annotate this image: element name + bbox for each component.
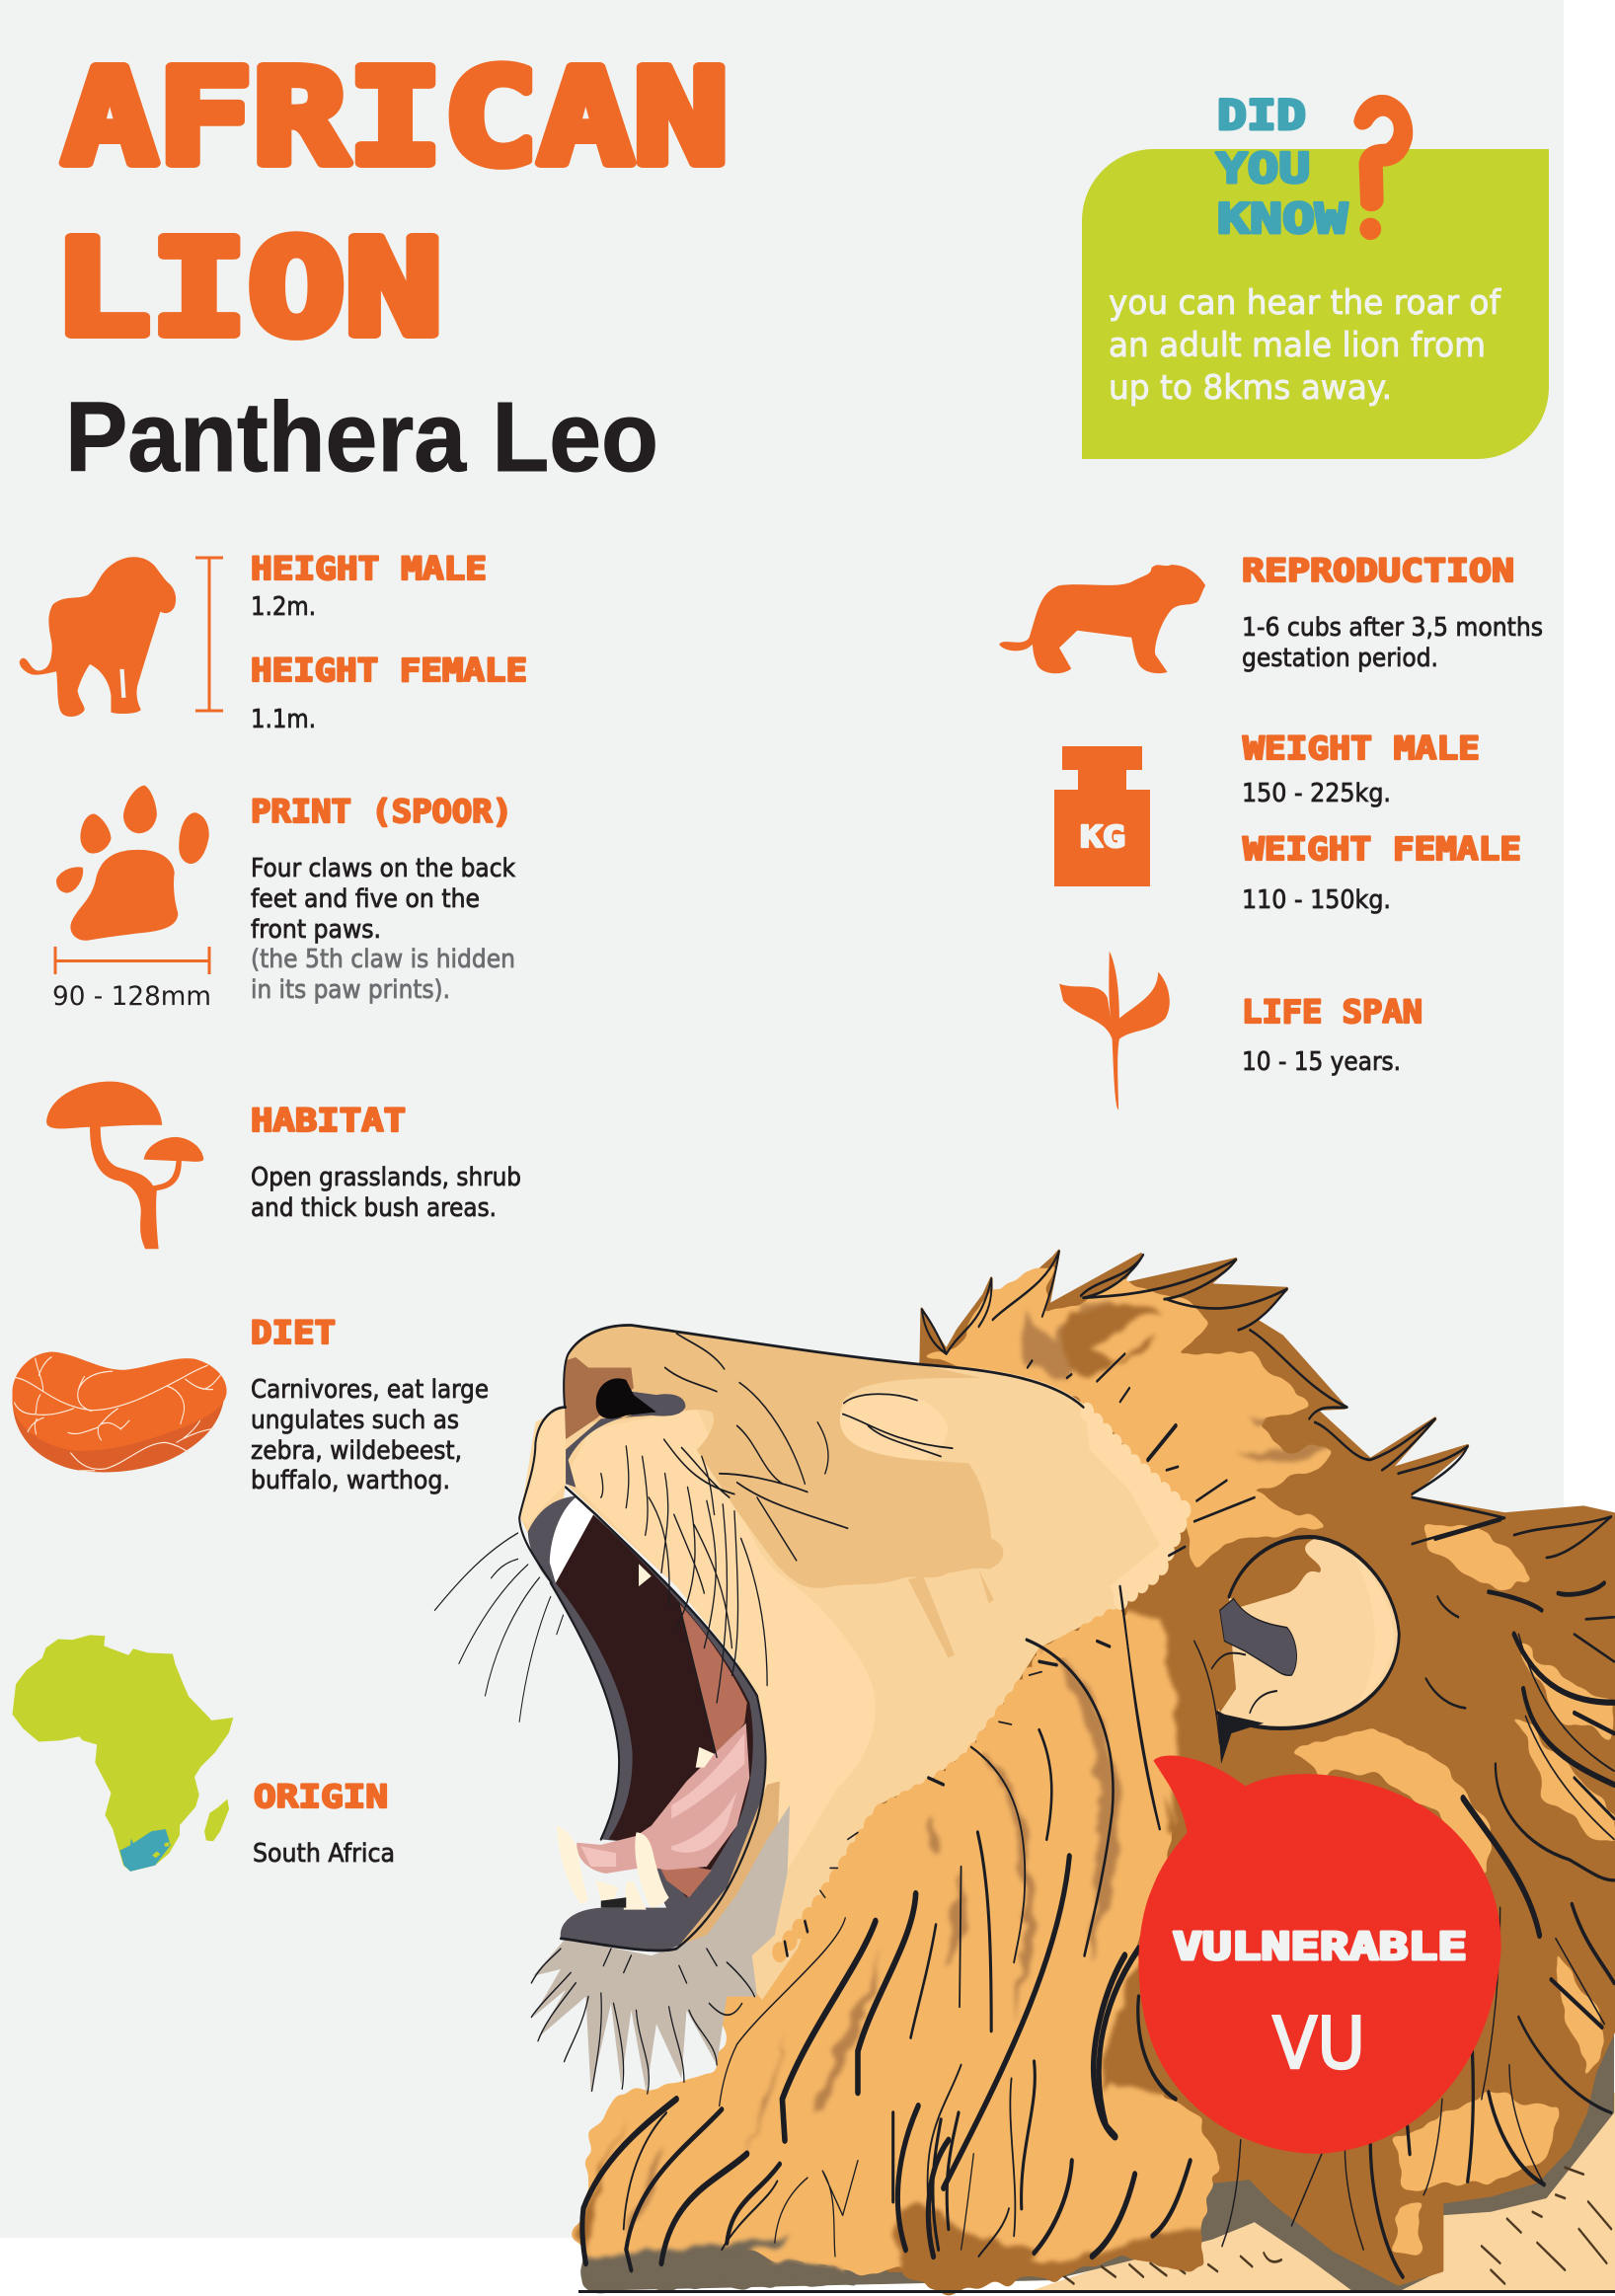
origin text: ORIGIN: [254, 1778, 388, 1815]
mane back: [842, 1252, 1614, 2284]
subtitle: Panthera Leo: Panthera Leo: [65, 382, 658, 493]
print text: [251, 793, 515, 1005]
origin text: [253, 1778, 395, 1869]
callout: did you know: [1082, 91, 1549, 459]
lion ear: [1212, 1537, 1399, 1764]
print text: Four claws on the back: [251, 854, 515, 883]
icon: question mark: [1353, 95, 1413, 240]
callout text: up to 8kms away.: [1109, 368, 1392, 408]
illustration: roaring lion: [434, 1252, 1615, 2293]
height text: 1.2m.: [251, 592, 316, 622]
icon: meat: [12, 1352, 227, 1472]
habitat text: and thick bush areas.: [251, 1193, 497, 1223]
weight text: [1242, 729, 1521, 915]
habitat text: HABITAT: [251, 1102, 406, 1139]
height text: 1.1m.: [251, 705, 316, 734]
print text: (the 5th claw is hidden: [251, 945, 515, 974]
diet text: buffalo, warthog.: [251, 1466, 450, 1495]
reproduction text: 1-6 cubs after 3,5 months: [1242, 613, 1543, 643]
habitat text: Open grasslands, shrub: [251, 1163, 521, 1192]
whiskers: [434, 1533, 564, 1722]
weight text: WEIGHT FEMALE: [1243, 830, 1521, 868]
icon: lion cub: [999, 565, 1205, 673]
life span text: [1242, 993, 1423, 1077]
icon: paw print: [56, 786, 209, 941]
scalloped fur edge around the face: [780, 1615, 1117, 1952]
badge code: VU: [1272, 2002, 1365, 2085]
reproduction text: REPRODUCTION: [1242, 552, 1514, 589]
height text: HEIGHT MALE: [251, 550, 487, 587]
print text: front paws.: [251, 915, 381, 945]
title: African Lion: LION: [53, 213, 442, 365]
callout text: an adult male lion from: [1109, 326, 1486, 365]
face: [520, 1325, 1186, 2094]
icon: weight: KG: [1080, 820, 1125, 855]
title: African Lion: AFRICAN: [62, 42, 729, 194]
diet text: ungulates such as: [251, 1406, 459, 1435]
diet text: Carnivores, eat large: [251, 1375, 489, 1405]
icon: lion silhouette: [20, 557, 176, 717]
height text: HEIGHT FEMALE: [251, 651, 527, 689]
weight text: 150 - 225kg.: [1242, 779, 1391, 808]
mane light fur patches: [578, 1265, 1614, 2290]
diet text: zebra, wildebeest,: [251, 1436, 462, 1466]
icon: sprout: [1059, 952, 1170, 1110]
print size measure: 90 - 128mm: [52, 981, 211, 1012]
origin text: South Africa: [253, 1839, 395, 1869]
speech bubble: [1138, 1755, 1501, 2154]
mane strokes left: [582, 1586, 1191, 2270]
callout heading: [1216, 91, 1348, 243]
title: African Lion: [53, 42, 729, 365]
weight text: WEIGHT MALE: [1243, 729, 1480, 767]
weight text: 110 - 150kg.: [1242, 885, 1391, 915]
callout text: you can hear the roar of: [1109, 283, 1501, 323]
diet text: [251, 1314, 489, 1495]
height bracket: [195, 558, 223, 711]
ground and shadow: [592, 2030, 1615, 2292]
print text: feet and five on the: [251, 884, 480, 914]
life span text: 10 - 15 years.: [1242, 1047, 1401, 1077]
mane strokes right: [922, 1252, 1614, 2277]
grey chin beard: [531, 1781, 790, 2094]
callout heading: YOU: [1216, 144, 1310, 192]
badge: vulnerable status: [1138, 1755, 1501, 2154]
icon: map of Africa: [12, 1635, 233, 1872]
ground line: [578, 2290, 1615, 2293]
icon: weight: [1054, 746, 1150, 886]
callout text: [1109, 283, 1501, 408]
icon: acacia tree: [46, 1082, 203, 1249]
callout panel: [1082, 149, 1549, 459]
open mouth: [528, 1496, 766, 1951]
nose: [565, 1357, 685, 1488]
life span text: LIFE SPAN: [1242, 993, 1423, 1031]
callout heading: DID: [1217, 91, 1306, 139]
print text: in its paw prints).: [251, 975, 450, 1005]
height text: [251, 550, 527, 734]
diet text: DIET: [251, 1314, 336, 1351]
print size measure: [52, 947, 211, 1012]
habitat text: [251, 1102, 521, 1223]
callout heading: KNOW: [1217, 194, 1348, 243]
badge label: VULNERABLE: [1173, 1925, 1467, 1968]
print text: PRINT (SPOOR): [251, 793, 512, 830]
reproduction text: [1242, 552, 1543, 673]
reproduction text: gestation period.: [1242, 644, 1438, 673]
head and mouth line work: [434, 1325, 1191, 2270]
